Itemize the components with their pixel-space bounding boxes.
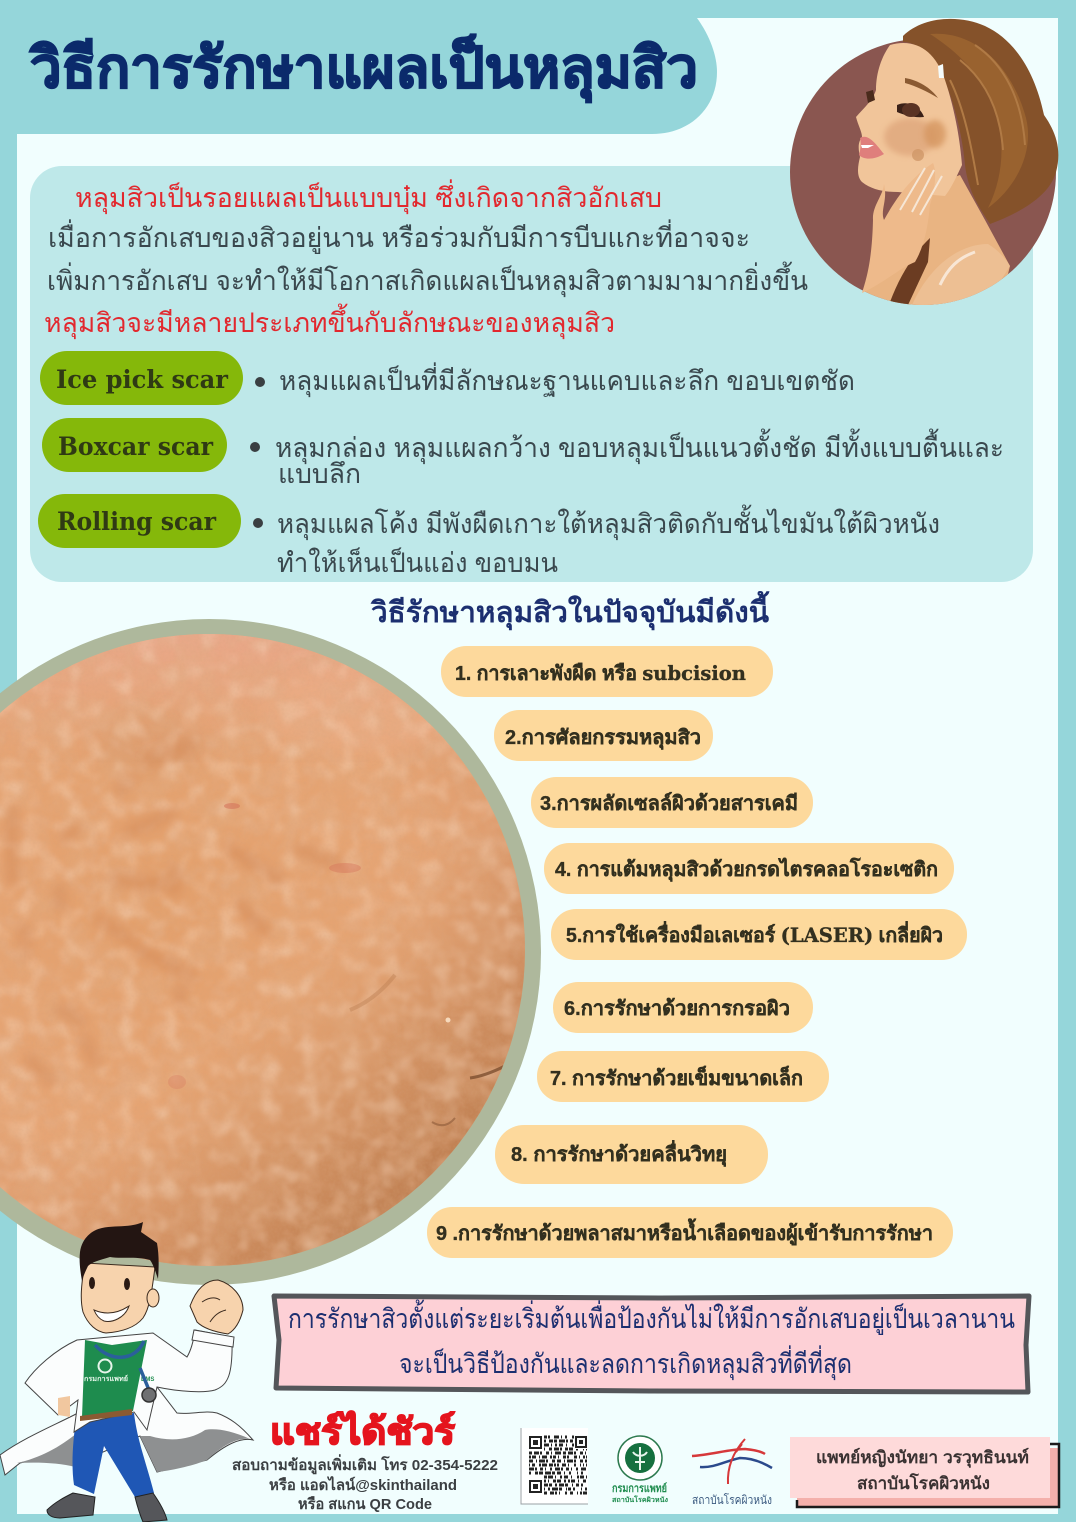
shoes [47,1493,167,1522]
scar type: ice pick: หลุมแผลเป็นที่มีลักษณะฐานแคบและลึก ขอบเขตชัด [279,362,855,398]
treatment 7 [537,1051,829,1102]
neck and hand [58,1396,70,1417]
QR code [520,1428,588,1504]
photo: acne scarred skin in ring [0,619,541,1285]
scar type: ice pick [40,351,855,405]
sleeve cuff [192,1330,234,1347]
trousers [73,1413,154,1497]
treatment 9 [427,1207,953,1258]
treatment 8: 8. การรักษาด้วยคลื่นวิทยุ [511,1139,727,1167]
title: วิธีการรักษาแผลเป็นหลุมสิว [29,33,698,103]
stethoscope [95,1341,149,1390]
share heading: แชร์ได้ชัวร์ [270,1410,456,1452]
logo: Department of Medical Services [612,1436,669,1504]
treatment 7: 7. การรักษาด้วยเข็มขนาดเล็ก [550,1065,803,1090]
scar type: boxcar: แบบลึก [278,459,361,489]
logo: Institute of Dermatology [692,1439,772,1507]
intro text: หลุมสิวจะมีหลายประเภทขึ้นกับลักษณะของหลุมสิว [44,303,615,340]
hair [80,1222,159,1281]
heading: treatments: วิธีรักษาหลุมสิวในปัจจุบันมีดังนี้ [370,590,770,630]
treatment 2: 2.การศัลยกรรมหลุมสิว [505,727,701,750]
treatment 6 [553,982,813,1033]
belt [80,1409,132,1421]
treatment list [427,646,967,1258]
treatment 4 [544,843,954,894]
logo: Institute of Dermatology: สถาบันโรคผิวหนัง [692,1493,772,1507]
shirt [82,1340,147,1417]
scar type: boxcar: Boxcar scar [58,432,214,461]
intro text: เพิ่มการอักเสบ จะทำให้มีโอกาสเกิดแผลเป็นหลุมสิวตามมามากยิ่งขึ้น [47,261,808,298]
scar type: ice pick: Ice pick scar [56,365,229,394]
panel: intro and scar types [30,166,1033,582]
cape [0,1387,253,1475]
contact information: สอบถามข้อมูลเพิ่มเติม โทร 02-354-5222 [232,1454,498,1475]
head [81,1263,155,1333]
treatment 3: 3.การผลัดเซลล์ผิวด้วยสารเคมี [540,792,798,815]
eyes [89,1277,95,1289]
logo: Department of Medical Services: สถาบันโรคผิวหนัง [612,1495,669,1504]
treatment 4: 4. การแต้มหลุมสิวด้วยกรดไตรคลอโรอะเซติก [555,857,938,882]
intro text [44,179,808,340]
icon: doctor superhero mascot [0,1222,253,1522]
intro text: หลุมสิวเป็นรอยแผลเป็นแบบบุ๋ม ซึ่งเกิดจากสิวอักเสบ [75,179,662,215]
treatment 1 [441,646,773,697]
shirt badge [98,1360,112,1372]
icon: woman with acne illustration [790,19,1058,306]
author name box: สถาบันโรคผิวหนัง [857,1473,990,1493]
treatment 5: 5.การใช้เครื่องมือเลเซอร์ (LASER) เกลี่ยผิว [566,920,943,947]
coat badge: DMS [141,1377,154,1383]
callout: prevention message: จะเป็นวิธีป้องกันและลดการเกิดหลุมสิวที่ดีที่สุด [399,1345,852,1381]
contact information: หรือ แอดไลน์@skinthailand [269,1475,457,1494]
icon: doctor superhero mascot: กรมการแพทย์ [84,1374,128,1383]
scar type: boxcar [42,418,1004,489]
treatment 6: 6.การรักษาด้วยการกรอผิว [564,997,790,1020]
treatment 1: 1. การเลาะพังผืด หรือ subcision [455,661,746,685]
scar type: rolling [38,494,940,578]
treatment 8 [495,1125,768,1184]
scar type: boxcar: หลุมกล่อง หลุมแผลกว้าง ขอบหลุมเป็นแนวตั้งชัด มีทั้งแบบตื้นและ [275,428,1004,465]
scar type: rolling: หลุมแผลโค้ง มีพังผืดเกาะใต้หลุมสิวติดกับชั้นไขมันใต้ผิวหนัง [277,504,940,541]
scar type: rolling: Rolling scar [57,507,217,536]
treatment 3 [531,777,813,828]
smile [94,1306,129,1321]
coat [25,1330,232,1432]
intro text: เมื่อการอักเสบของสิวอยู่นาน หรือร่วมกับมีการบีบแกะที่อาจจะ [48,219,750,254]
logo: Department of Medical Services: กรมการแพทย์ [612,1482,667,1495]
fist [190,1280,243,1334]
treatment 5 [551,909,967,960]
author name box [790,1437,1059,1507]
contact information [232,1454,498,1513]
scar type: rolling: ทำให้เห็นเป็นแอ่ง ขอบมน [277,545,558,578]
treatment 9: 9 .การรักษาด้วยพลาสมาหรือน้ำเลือดของผู้เข้ารับการรักษา [436,1218,933,1247]
header banner [17,18,717,134]
treatment 2 [494,710,713,761]
contact information: หรือ สแกน QR Code [298,1496,432,1513]
callout: prevention message [274,1296,1029,1392]
author name box: แพทย์หญิงนัทยา วรวุทธินนท์ [816,1447,1029,1468]
